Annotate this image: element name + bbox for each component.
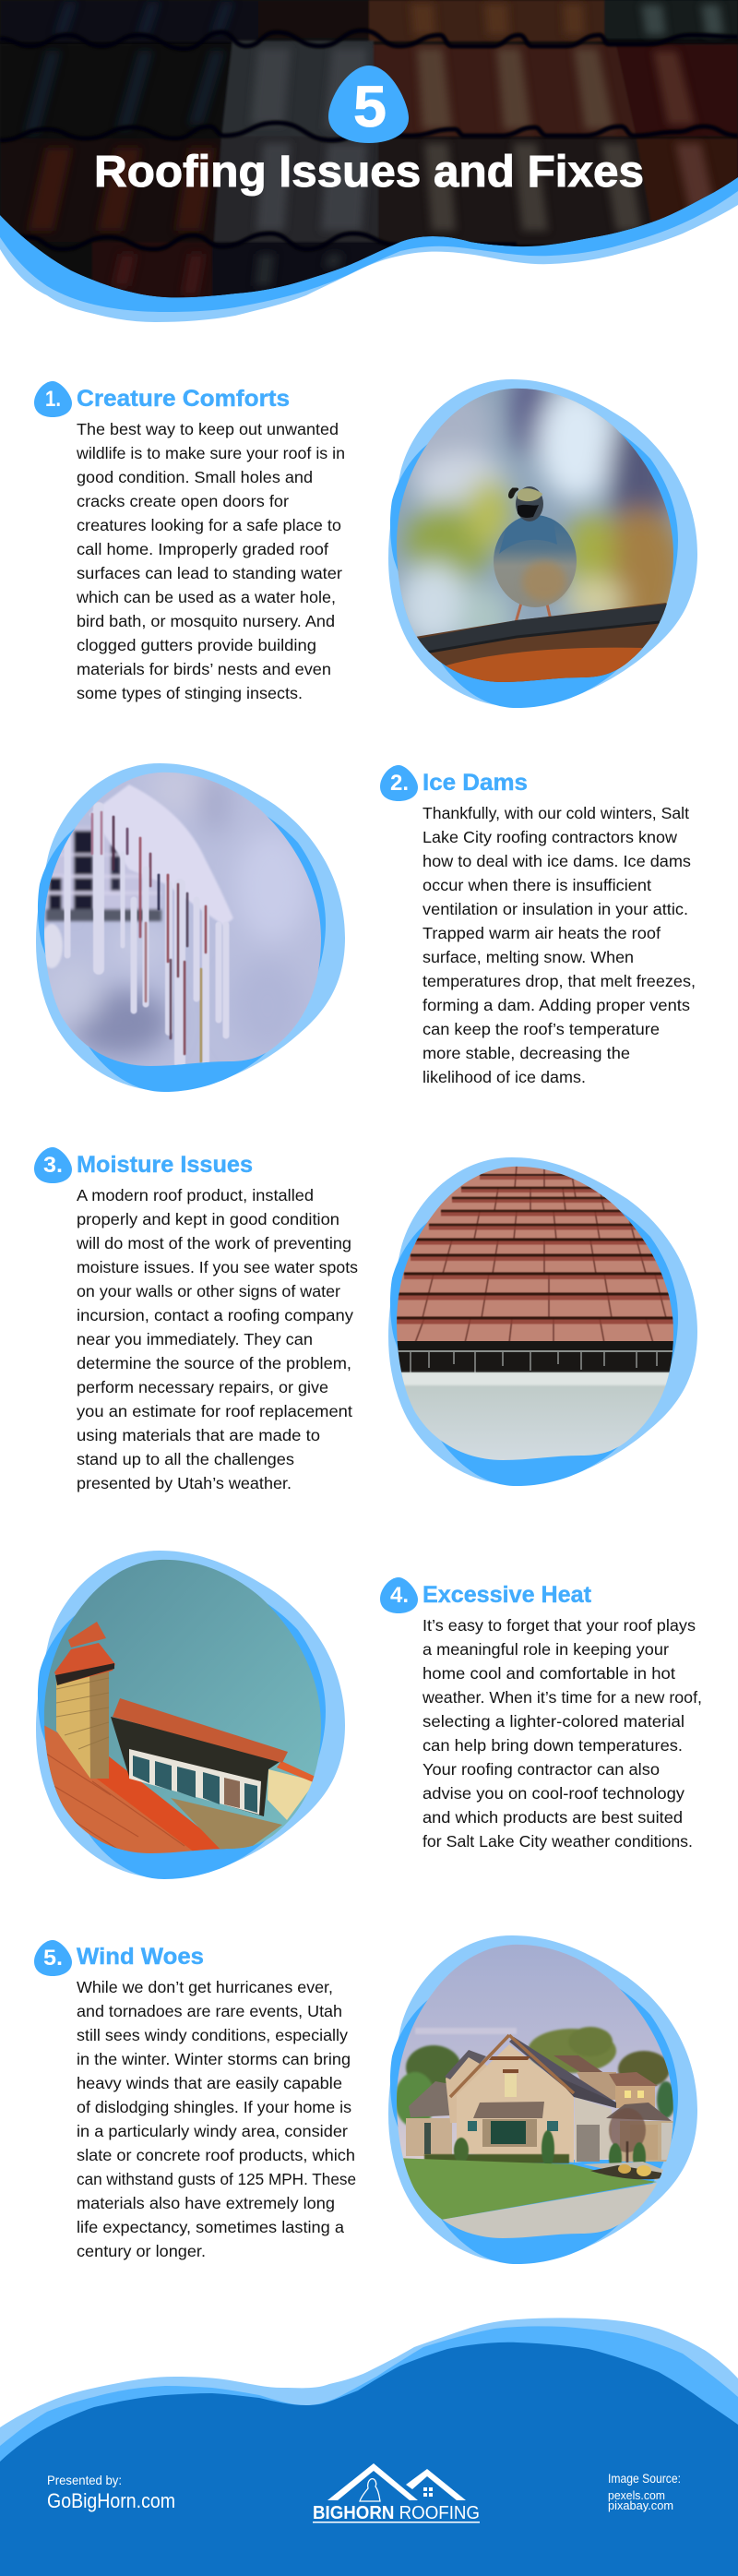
windows bbox=[129, 1749, 261, 1815]
text block 3: near you immediately. They can bbox=[77, 1330, 313, 1348]
photo blob 1: quail on roof bbox=[388, 365, 697, 708]
icicles bbox=[67, 808, 226, 1063]
footer wave: light band bbox=[0, 2318, 738, 2576]
text block 4: advise you on cool-roof technology bbox=[423, 1784, 684, 1803]
number badge 2 bbox=[380, 765, 418, 801]
snow band bbox=[89, 785, 233, 926]
dormer bbox=[111, 1717, 282, 1816]
photo blob 5: brick house bbox=[388, 1935, 697, 2264]
text block 2 bbox=[423, 804, 696, 1086]
header wave: medium band bbox=[0, 166, 738, 312]
shrubs and tree bbox=[423, 2108, 647, 2164]
porch roof bbox=[473, 2102, 544, 2118]
text block 4: for Salt Lake City weather conditions. bbox=[423, 1832, 693, 1851]
text block 1: creatures looking for a safe place to bbox=[77, 516, 341, 534]
flower bed bbox=[590, 2165, 661, 2179]
text block 2: Thankfully, with our cold winters, Salt bbox=[423, 804, 689, 822]
header roof photo bbox=[0, 0, 738, 332]
text block 1: materials for birds’ nests and even bbox=[77, 660, 331, 678]
text block 3 bbox=[76, 1186, 358, 1492]
panel: section 4 excessive heat bbox=[380, 1577, 702, 1851]
header wave: light band bbox=[0, 166, 738, 322]
text block 4: selecting a lighter-colored material bbox=[423, 1712, 684, 1731]
text block 3: perform necessary repairs, or give bbox=[77, 1378, 328, 1396]
panel: section 2 ice dams bbox=[380, 765, 696, 1086]
quail bbox=[494, 486, 577, 626]
right stone wall bbox=[575, 2097, 612, 2163]
text block 3: will do most of the work of preventing bbox=[76, 1234, 351, 1252]
tile highlights bbox=[24, 2, 724, 295]
main roof bbox=[44, 1726, 227, 1853]
photo blob 2: icicles bbox=[36, 763, 345, 1092]
logo: Bighorn Roofing bbox=[313, 2463, 480, 2523]
chimney bbox=[56, 1676, 90, 1779]
title: Roofing Issues and Fixes bbox=[94, 148, 644, 197]
text block 2: how to deal with ice dams. Ice dams bbox=[423, 852, 691, 870]
panel: section 3 moisture issues bbox=[34, 1147, 358, 1492]
footer: image source bbox=[608, 2471, 681, 2512]
driveway bbox=[442, 2183, 657, 2238]
text block 4: It’s easy to forget that your roof plays bbox=[423, 1616, 696, 1635]
number badge 5: 5. bbox=[43, 1946, 63, 1971]
dormer roof bbox=[113, 1698, 288, 1763]
text block 1: which can be used as a water hole, bbox=[76, 588, 336, 606]
text block 2: occur when there is insufficient bbox=[423, 876, 651, 894]
text block 5: century or longer. bbox=[77, 2242, 206, 2260]
text block 5: heavy winds that are easily capable bbox=[77, 2074, 342, 2092]
text block 4: can help bring down temperatures. bbox=[423, 1736, 683, 1755]
heading 2: Ice Dams bbox=[423, 770, 528, 796]
number badge 3 bbox=[34, 1147, 72, 1183]
window grid bbox=[46, 826, 161, 921]
text block 5: slate or concrete roof products, which bbox=[77, 2146, 355, 2164]
text block 2: surface, melting snow. When bbox=[423, 948, 634, 966]
text block 1: surfaces can lead to standing water bbox=[77, 564, 342, 582]
footer: presented by: GoBigHorn.com bbox=[47, 2489, 175, 2512]
text block 1 bbox=[76, 420, 345, 702]
text block 1: wildlife is to make sure your roof is in bbox=[76, 444, 345, 462]
panel: section 1 creature comforts bbox=[34, 381, 345, 702]
text block 3: using materials that are made to bbox=[77, 1426, 320, 1444]
text block 2: more stable, decreasing the bbox=[423, 1044, 630, 1062]
text block 1: cracks create open doors for bbox=[77, 492, 289, 510]
text block 3: A modern roof product, installed bbox=[77, 1186, 314, 1204]
number badge 4 bbox=[380, 1577, 418, 1613]
heading 4: Excessive Heat bbox=[423, 1582, 592, 1608]
footer: image source: pexels.com bbox=[608, 2488, 665, 2502]
heading 5: Wind Woes bbox=[77, 1944, 204, 1970]
text block 2: temperatures drop, that melt freezes, bbox=[423, 972, 696, 990]
photo blob 4: chimney and dormer bbox=[36, 1551, 345, 1879]
text block 3: presented by Utah’s weather. bbox=[77, 1474, 292, 1492]
side wing bbox=[406, 2118, 452, 2156]
text block 5: in the winter. Winter storms can bring bbox=[77, 2050, 351, 2068]
text block 2: Lake City roofing contractors know bbox=[423, 828, 677, 846]
trees bbox=[395, 2027, 675, 2127]
upper right bbox=[554, 2055, 603, 2072]
logo: Bighorn Roofing: BIGHORN ROOFING bbox=[313, 2503, 480, 2523]
text block 4 bbox=[422, 1616, 702, 1851]
straw roof bbox=[171, 1798, 282, 1850]
text block 2: likelihood of ice dams. bbox=[423, 1068, 586, 1086]
text block 5: still sees windy conditions, especially bbox=[77, 2026, 348, 2044]
text block 4: weather. When it’s time for a new roof, bbox=[422, 1688, 702, 1707]
text block 1: good condition. Small holes and bbox=[77, 468, 313, 486]
text block 5: While we don’t get hurricanes ever, bbox=[77, 1978, 333, 1996]
lawn bbox=[392, 2158, 657, 2220]
text block 4: home cool and comfortable in hot bbox=[423, 1664, 675, 1683]
tile rows edges bbox=[0, 30, 738, 249]
number badge 4: 4. bbox=[390, 1583, 409, 1608]
icon: roofs bbox=[327, 2463, 466, 2501]
cream wall bbox=[268, 1769, 315, 1820]
main gable wall bbox=[457, 2044, 574, 2163]
text block 3: determine the source of the problem, bbox=[77, 1354, 351, 1372]
text block 3: properly and kept in good condition bbox=[77, 1210, 339, 1228]
text block 2: can keep the roof’s temperature bbox=[423, 1020, 660, 1038]
text block 5: and tornadoes are rare events, Utah bbox=[77, 2002, 342, 2020]
text block 3: you an estimate for roof replacement bbox=[77, 1402, 352, 1420]
footer: image source: Image Source: bbox=[608, 2471, 681, 2486]
text block 1: some types of stinging insects. bbox=[77, 684, 303, 702]
main gable trim bbox=[450, 2035, 574, 2097]
text block 4: a meaningful role in keeping your bbox=[423, 1640, 669, 1659]
footer: image source: pixabay.com bbox=[608, 2498, 673, 2512]
title number badge: 5 bbox=[353, 75, 387, 139]
panel: section 5 wind woes bbox=[34, 1940, 356, 2260]
text block 5: life expectancy, sometimes lasting a bbox=[77, 2218, 344, 2236]
text block 4: and which products are best suited bbox=[423, 1808, 683, 1827]
footer wave: dark base bbox=[0, 2342, 738, 2576]
number badge 1 bbox=[34, 381, 72, 417]
heading 1: Creature Comforts bbox=[77, 386, 290, 412]
number badge 5 bbox=[34, 1940, 72, 1976]
text block 2: ventilation or insulation in your attic. bbox=[423, 900, 688, 918]
main roof right slope bbox=[509, 2037, 616, 2103]
text block 1: clogged gutters provide building bbox=[77, 636, 316, 654]
text block 4: Your roofing contractor can also bbox=[423, 1760, 660, 1779]
text block 3: stand up to all the challenges bbox=[77, 1450, 294, 1468]
number badge 2: 2. bbox=[390, 771, 409, 796]
text block 3: on your walls or other signs of water bbox=[77, 1282, 340, 1300]
roof ledge bbox=[417, 603, 667, 682]
text block 1: call home. Improperly graded roof bbox=[77, 540, 328, 558]
text block 3: incursion, contact a roofing company bbox=[77, 1306, 353, 1324]
heading 3: Moisture Issues bbox=[77, 1152, 253, 1178]
footer: presented by: Presented by: bbox=[47, 2473, 122, 2487]
footer wave: medium band bbox=[0, 2326, 738, 2576]
small gable bbox=[446, 2057, 487, 2123]
text block 5: of dislodging shingles. If your home is bbox=[77, 2098, 351, 2116]
text block 5: in a particularly windy area, consider bbox=[77, 2122, 348, 2140]
text block 2: forming a dam. Adding proper vents bbox=[423, 996, 690, 1014]
small white blob lower left bbox=[44, 923, 63, 969]
title number badge bbox=[328, 66, 409, 143]
text block 1: The best way to keep out unwanted bbox=[77, 420, 339, 438]
text block 3: moisture issues. If you see water spots bbox=[77, 1258, 358, 1276]
number badge 1: 1. bbox=[45, 387, 61, 412]
number badge 3: 3. bbox=[43, 1153, 63, 1178]
footer: presented by bbox=[47, 2473, 175, 2512]
photo blob 3: wet tile roof bbox=[388, 1157, 697, 1486]
text block 5: materials also have extremely long bbox=[77, 2194, 335, 2212]
lower right garage bbox=[620, 2121, 673, 2162]
text block 2: Trapped warm air heats the roof bbox=[423, 924, 661, 942]
text block 5: can withstand gusts of 125 MPH. These bbox=[77, 2170, 356, 2188]
text block 5 bbox=[77, 1978, 356, 2260]
text block 1: bird bath, or mosquito nursery. And bbox=[77, 612, 335, 630]
